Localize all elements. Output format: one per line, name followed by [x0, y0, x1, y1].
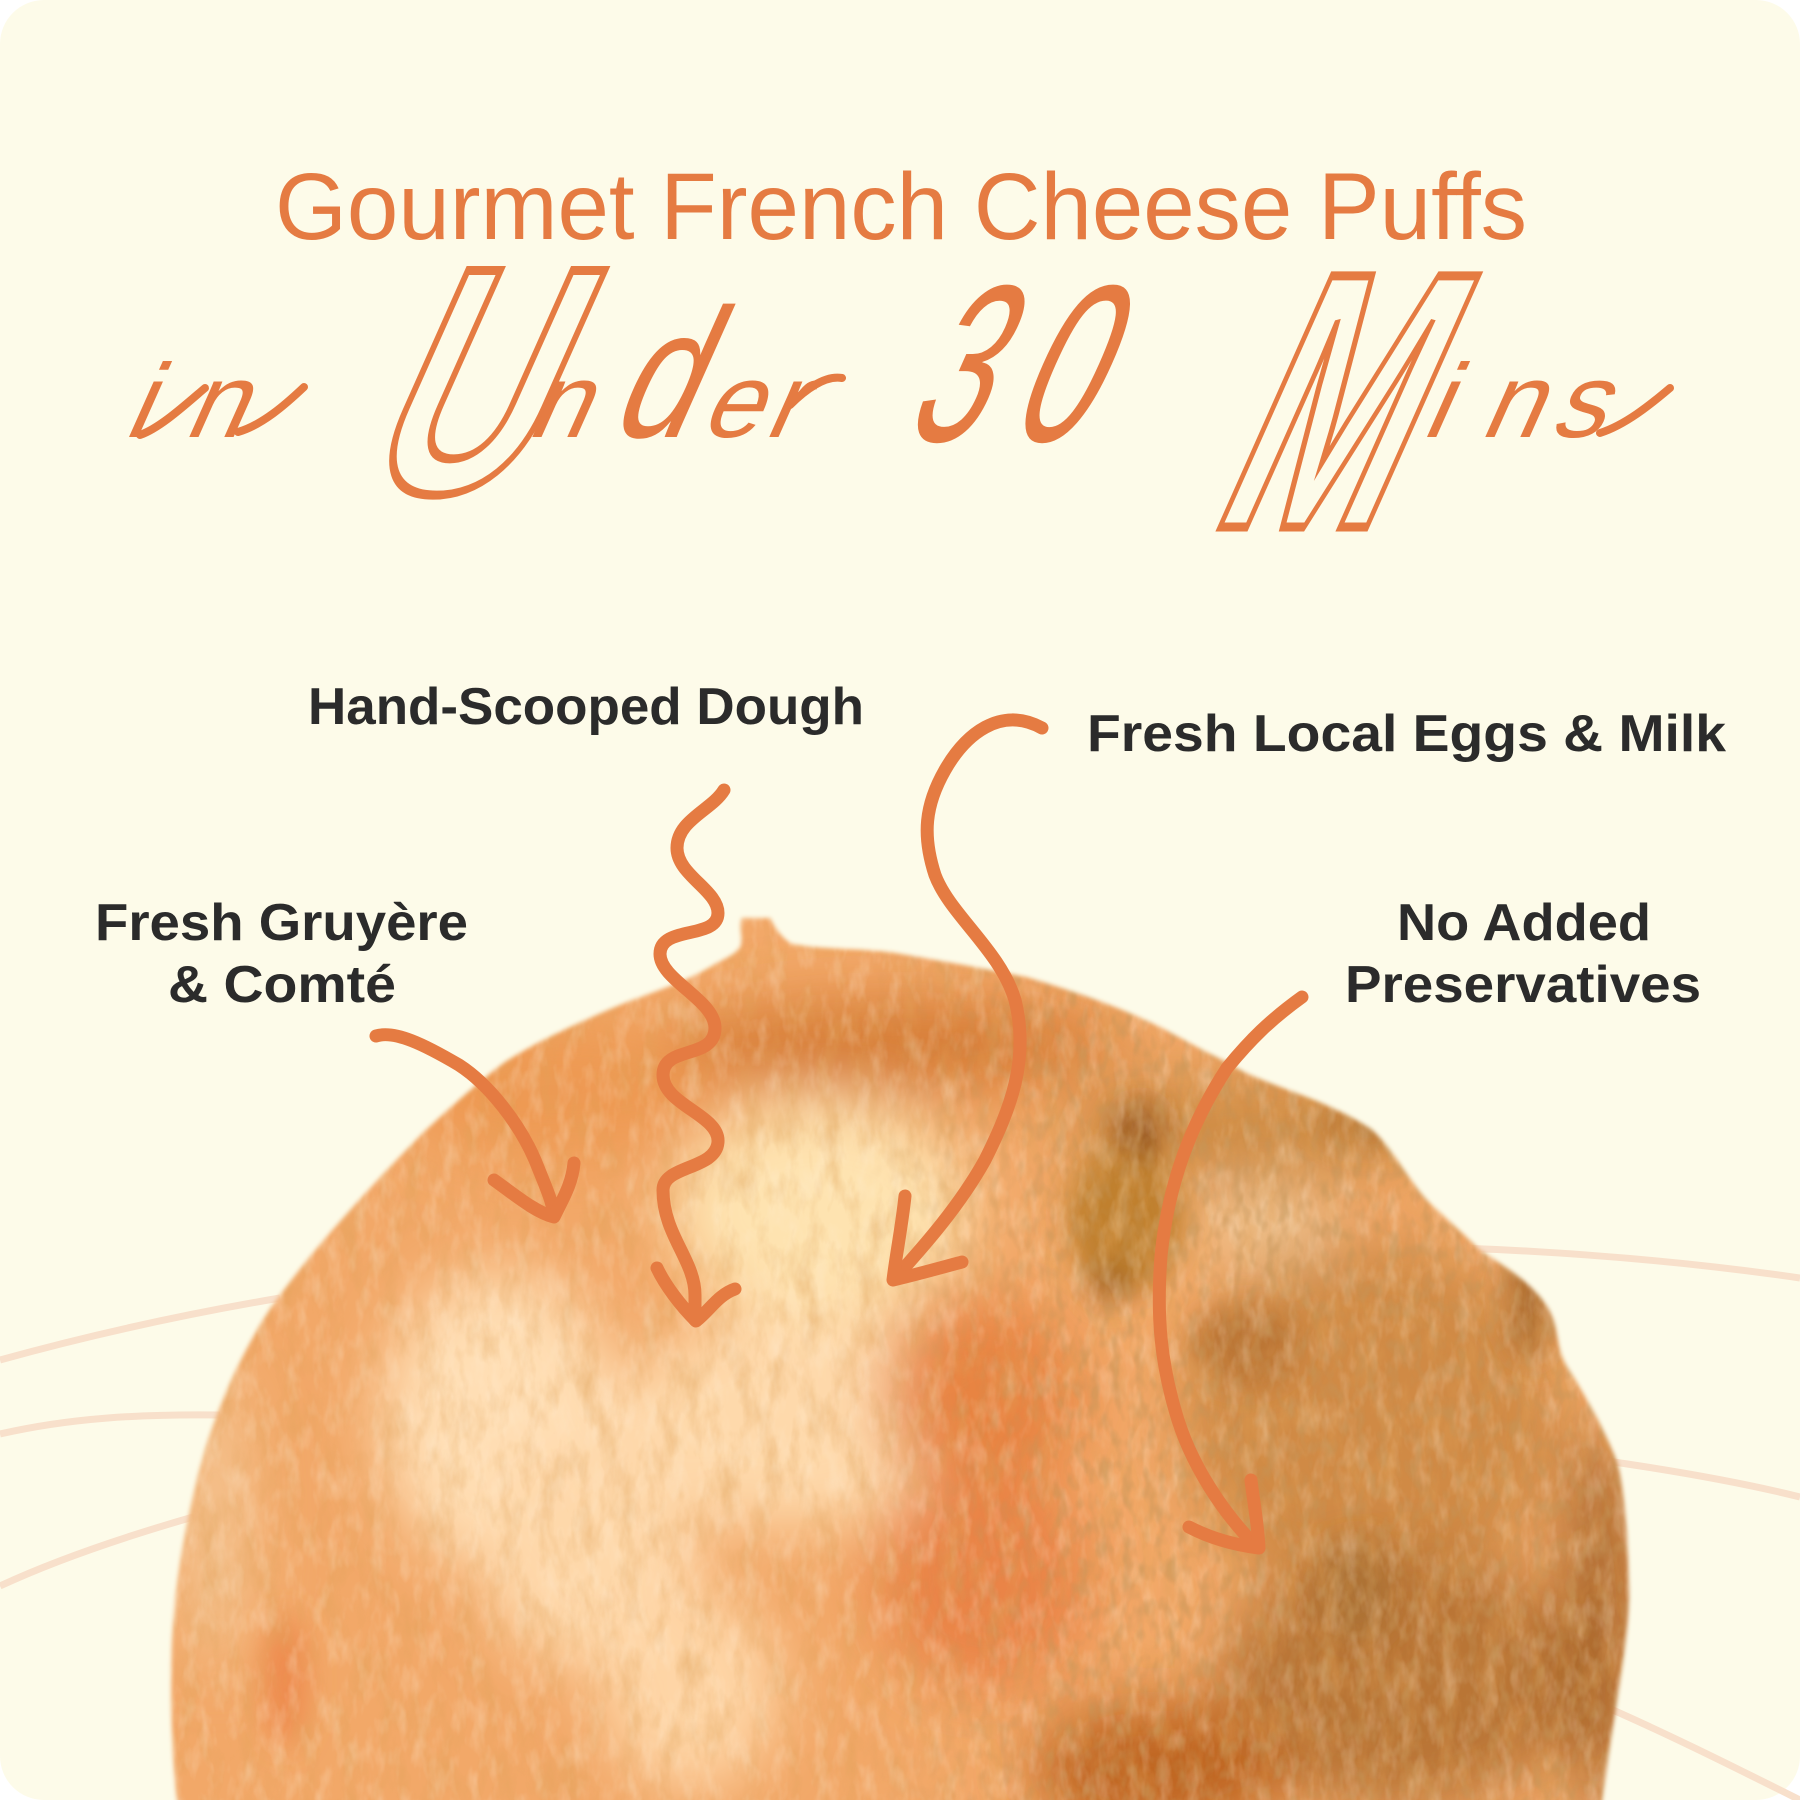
title: script line: i [1410, 343, 1485, 460]
label: no added preservatives: Preservatives [1345, 956, 1701, 1014]
arrow: gruyere [376, 1035, 574, 1217]
title: script line: 3 [879, 238, 1066, 489]
script flourishes [140, 378, 1670, 435]
title: script line: n [515, 343, 625, 460]
title: script line: d [589, 270, 760, 476]
title: script line: s [1538, 343, 1643, 460]
decorative arcs behind the puff [0, 1248, 1800, 1800]
title: script line: n [172, 343, 282, 460]
label: hand-scooped dough: Hand-Scooped Dough [308, 678, 864, 736]
title: script line: 0 [982, 238, 1174, 489]
label: no added preservatives: No Added [1397, 894, 1651, 952]
title: first line: Gourmet French Cheese Puffs [275, 154, 1527, 260]
label: fresh local eggs and milk: Fresh Local Eggs & Milk [1087, 705, 1726, 763]
label: fresh gruyere and comte [95, 894, 468, 1014]
title: script line: U [325, 200, 650, 561]
photo-like cheese puff [150, 900, 1650, 1800]
title: script line: e [688, 343, 798, 460]
title: script line: n [1468, 343, 1578, 460]
title: script line: M [1171, 198, 1527, 605]
arrow: no preservatives [1159, 997, 1302, 1548]
title: script line: i [112, 343, 187, 460]
arrow: wavy dough [657, 790, 735, 1321]
label: fresh gruyere and comte: Fresh Gruyère [95, 894, 468, 952]
arrow: eggs and milk [893, 720, 1042, 1280]
label: no added preservatives [1345, 894, 1701, 1014]
label: fresh gruyere and comte: & Comté [168, 956, 396, 1014]
title: script line: r [752, 343, 839, 460]
